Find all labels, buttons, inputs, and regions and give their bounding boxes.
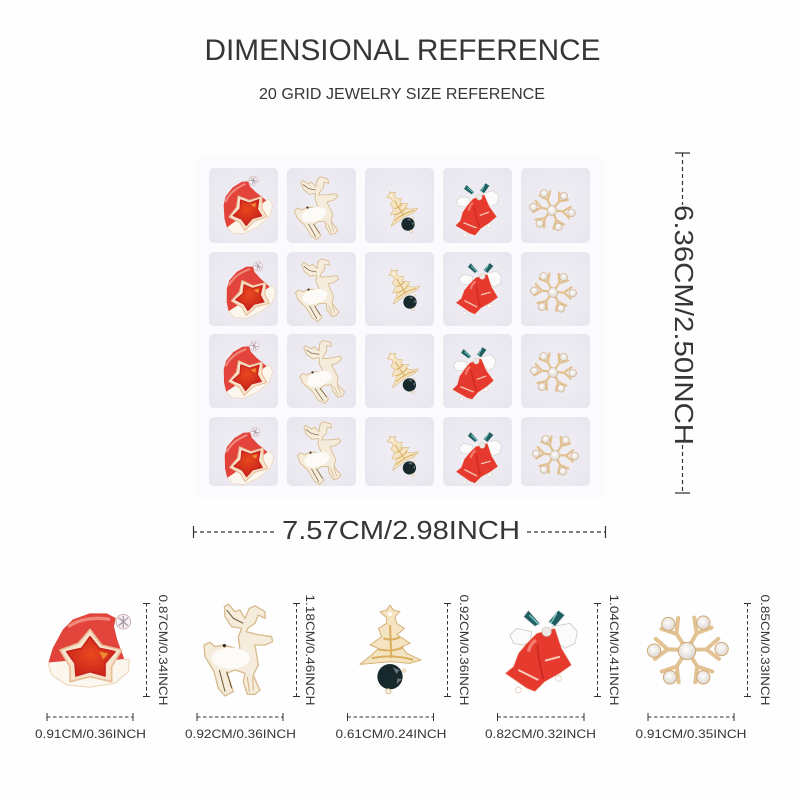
hat width dimension: 0.91CM/0.36INCH bbox=[35, 727, 146, 741]
tree width dimension bbox=[336, 713, 446, 741]
tray height dimension: 6.36CM/2.50INCH bbox=[669, 205, 699, 445]
tray row 1 charms bbox=[211, 173, 579, 243]
hat width dimension bbox=[35, 713, 146, 741]
tray width dimension bbox=[193, 515, 606, 545]
snowflake height dimension: 0.85CM/0.33INCH bbox=[758, 594, 772, 706]
panel: jewelry tray bbox=[195, 155, 605, 498]
subtitle: 20 GRID JEWELRY SIZE REFERENCE bbox=[259, 86, 545, 103]
bells width dimension: 0.82CM/0.32INCH bbox=[485, 727, 596, 741]
snowflake width dimension bbox=[636, 713, 746, 741]
tree height dimension: 0.92CM/0.36INCH bbox=[457, 594, 471, 706]
charm: christmas tree bbox=[336, 594, 471, 741]
snowflake width dimension: 0.91CM/0.35INCH bbox=[636, 727, 746, 741]
hat height dimension: 0.87CM/0.34INCH bbox=[156, 594, 170, 706]
snowflake height dimension bbox=[744, 594, 772, 706]
tray height dimension bbox=[669, 153, 699, 493]
bells height dimension bbox=[594, 594, 621, 706]
charm: santa hat bbox=[35, 594, 170, 741]
tree height dimension bbox=[444, 594, 471, 706]
reindeer width dimension: 0.92CM/0.36INCH bbox=[185, 727, 296, 741]
tray row 4 charms bbox=[212, 418, 580, 491]
reindeer height dimension bbox=[293, 594, 317, 706]
tree width dimension: 0.61CM/0.24INCH bbox=[336, 727, 446, 741]
charm: reindeer bbox=[185, 594, 317, 741]
bells width dimension bbox=[485, 713, 596, 741]
charm: bells bbox=[485, 594, 621, 741]
tray width dimension: 7.57CM/2.98INCH bbox=[282, 515, 520, 545]
tray row 2 charms bbox=[214, 255, 578, 325]
reindeer width dimension bbox=[185, 713, 296, 741]
hat height dimension bbox=[143, 594, 170, 706]
bells height dimension: 1.04CM/0.41INCH bbox=[607, 594, 621, 706]
tray row 3 charms bbox=[211, 336, 578, 408]
reindeer height dimension: 1.18CM/0.46INCH bbox=[303, 594, 317, 706]
charm: snowflake bbox=[636, 594, 772, 741]
title: DIMENSIONAL REFERENCE bbox=[204, 34, 600, 67]
